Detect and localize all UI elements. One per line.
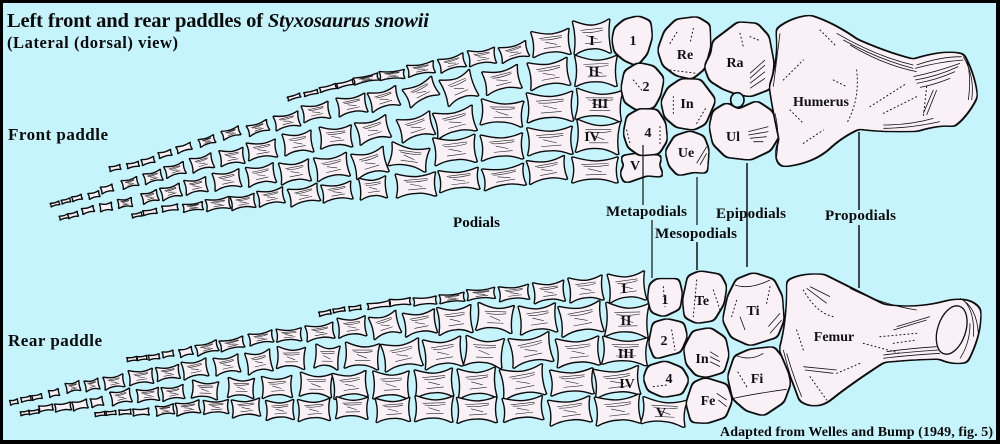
rear metapodial 2 [649,319,687,358]
front bone labels: I [589,34,595,49]
rear In bone [684,328,728,377]
front bone labels: IV [584,130,600,145]
Ra bone [705,23,773,96]
subtitle: (Lateral (dorsal) view) [7,33,178,52]
rear metapodial 1 [648,279,682,316]
rear bone labels: IV [619,377,635,392]
femur head [931,302,973,358]
front bone labels: Re [677,48,693,63]
front mesopodials, epipodials and humerus [613,16,977,183]
femur shading [783,287,978,398]
rear digit IV phalanges [20,364,641,416]
front digit V phalanges [132,155,618,218]
rear bone labels [618,282,854,421]
Te bone [683,272,726,323]
femur [780,275,980,405]
foramen between radius and ulna [731,93,744,107]
front digit III phalanges [50,88,623,207]
In bone [662,79,715,129]
rear bone labels: II [621,314,631,329]
rear bone labels: I [621,282,627,297]
humerus [770,16,977,166]
rear bone labels: Fi [751,372,763,387]
rear digit III phalanges [10,332,648,405]
front bone labels: 2 [642,80,650,95]
Fi bone [728,347,790,415]
rear bone labels: Femur [814,330,854,345]
front bone labels: V [630,159,640,174]
rear bone labels: III [618,347,634,362]
Ul bone [710,102,780,159]
label: podials: Podials [453,215,500,231]
front bone labels: Ue [678,146,694,161]
front digit IV phalanges [59,119,621,220]
rear bone labels: Fe [701,394,715,409]
front paddle label: Front paddle [8,125,108,144]
Ti bone [723,273,783,345]
front bone labels: Ul [726,130,740,145]
rear bone labels: Ti [747,304,760,319]
front bone labels [584,34,850,174]
front digit II phalanges [109,56,617,172]
front bone V [621,154,663,183]
rear bone labels: Te [695,294,709,309]
Ue bone [666,132,708,175]
rear paddle label: Rear paddle [8,331,102,350]
humerus stippling [783,30,927,143]
front bone labels: III [592,97,608,112]
label: mesopodials: Mesopodials [655,226,737,242]
carpal stippling [627,28,758,147]
Fe bone [687,378,732,423]
front metapodial 2 [622,63,663,109]
rear digit V phalanges [95,394,687,427]
front metapodial 4 [624,109,667,155]
front bone labels: 4 [644,126,652,141]
label: epipodials: Epipodials [716,206,786,222]
rear digit I phalanges [319,271,647,316]
front bone labels: Ra [726,56,744,71]
femur stippling [797,290,917,400]
front bone labels: II [589,65,599,80]
rear bone labels: 1 [662,293,668,308]
rear digit II phalanges [127,301,649,362]
rear bone labels: V [656,406,666,421]
label: propodials: Propodials [825,208,896,224]
rear carpal shading [710,280,787,407]
Re bone [658,17,710,78]
front paddle [50,16,977,220]
humerus shading [773,33,972,157]
front bone labels: 1 [630,34,636,49]
rear carpal stippling [653,280,770,387]
radius and ulna shading [697,60,768,165]
rear bone labels: 2 [660,334,668,349]
rear mesopodials, epipodials and femur [644,272,980,423]
front bone labels: In [680,97,694,112]
front metapodial 1 [613,17,652,65]
rear paddle [10,271,980,427]
rear metapodial 4 [644,362,688,397]
front bone labels: Humerus [793,95,850,110]
leader lines [643,132,859,288]
label: metapodials: Metapodials [606,204,687,220]
rear bone labels: In [695,352,709,367]
front digit I phalanges [287,19,612,101]
title: Left front and rear paddles of Styxosaurus snowii [7,10,429,32]
credit line: Adapted from Welles and Bump (1949, fig. 5) [720,425,993,440]
rear bone labels: 4 [666,372,672,387]
